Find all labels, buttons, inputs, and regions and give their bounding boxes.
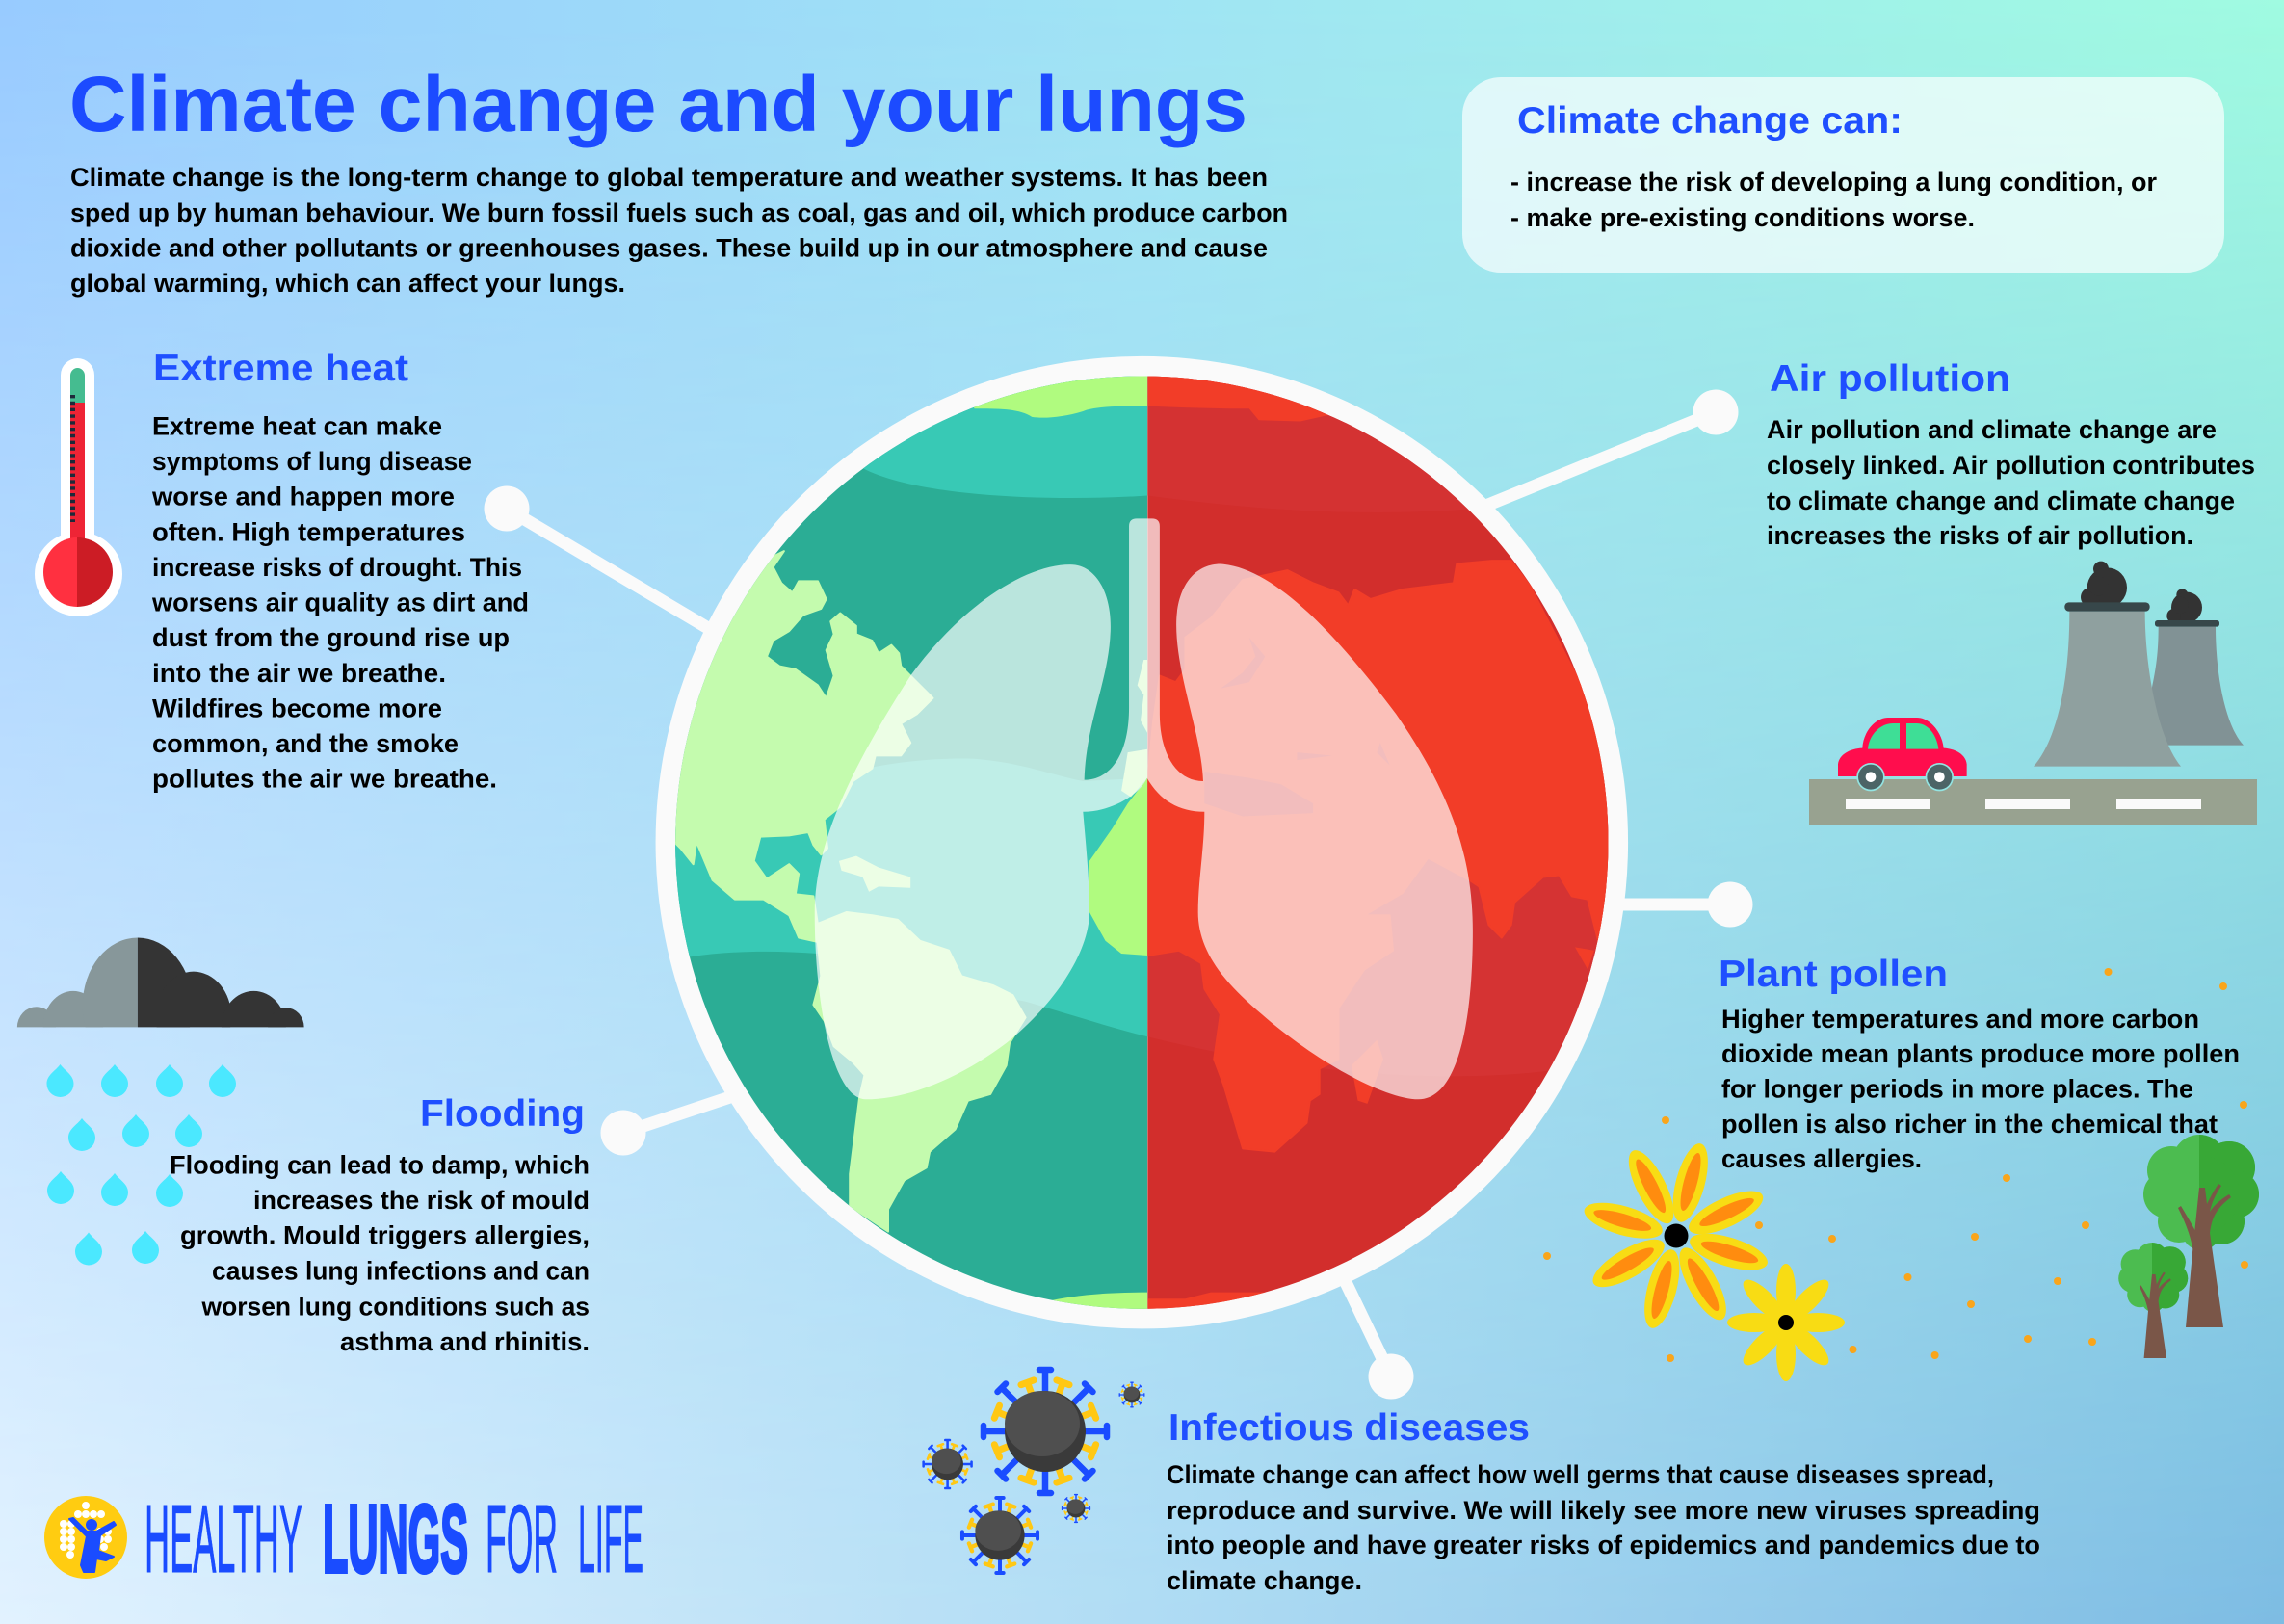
icon: large flower — [1581, 1139, 1772, 1332]
heading: extreme heat: Extreme heat — [153, 348, 408, 389]
lungs and trachea — [815, 518, 1473, 1099]
title: Climate change and your lungs — [69, 61, 1247, 148]
icon: thermometer — [35, 358, 122, 616]
text: extreme heat: increase risks of drought. This — [152, 553, 522, 582]
logo: Healthy Lungs for Life — [44, 1485, 643, 1593]
heading: air pollution: Air pollution — [1770, 358, 2010, 400]
intro text block: Climate change is the long-term change to global temperature and weather systems. It has been — [70, 163, 1268, 192]
heading: plant pollen: Plant pollen — [1719, 954, 1948, 995]
text: infectious diseases: into people and have greater risks of epidemics and pandemics due to — [1167, 1531, 2040, 1559]
text: extreme heat: into the air we breathe. — [152, 659, 446, 688]
wordmark: FOR — [486, 1485, 558, 1593]
text: extreme heat: symptoms of lung disease — [152, 447, 472, 476]
text: flooding: Flooding can lead to damp, which — [170, 1150, 590, 1179]
callout text: - make pre-existing conditions worse. — [1510, 203, 1975, 232]
text: air pollution: Air pollution and climate change are — [1767, 415, 2217, 444]
text: extreme heat: pollutes the air we breathe. — [152, 765, 497, 794]
text: extreme heat: Wildfires become more — [152, 694, 442, 722]
intro text block: sped up by human behaviour. We burn fossil fuels such as coal, gas and oil, which produce carbon — [70, 198, 1288, 227]
icon: small flower — [1727, 1264, 1845, 1381]
text: extreme heat: worsens air quality as dirt and — [151, 589, 529, 617]
wordmark: LUNGS — [323, 1485, 468, 1593]
text: extreme heat — [151, 412, 529, 794]
text: plant pollen: dioxide mean plants produce more pollen — [1721, 1039, 2240, 1068]
icon: road — [1809, 779, 2257, 825]
text: infectious diseases: Climate change can affect how well germs that cause diseases spread, — [1167, 1460, 1994, 1489]
icon: logo badge — [44, 1496, 127, 1579]
text: extreme heat: Extreme heat can make — [152, 412, 442, 441]
text: extreme heat: worse and happen more — [151, 483, 455, 511]
text: extreme heat: common, and the smoke — [152, 729, 459, 758]
intro text block: dioxide and other pollutants or greenhouses gases. These build up in our atmosphere and cause — [70, 233, 1268, 262]
text: flooding: growth. Mould triggers allergies, — [180, 1221, 590, 1250]
icon: large tree — [2143, 1135, 2259, 1327]
callout text — [1510, 168, 2157, 232]
text: flooding: increases the risk of mould — [253, 1186, 590, 1215]
text: air pollution: to climate change and climate change — [1767, 486, 2235, 515]
text: infectious diseases: reproduce and survive. We will likely see more new viruses spreading — [1167, 1496, 2040, 1525]
icon: back tower — [2151, 589, 2244, 746]
heading: infectious diseases: Infectious diseases — [1168, 1407, 1530, 1449]
text: flooding: asthma and rhinitis. — [340, 1327, 590, 1356]
intro text block — [70, 163, 1288, 298]
text: flooding: causes lung infections and can — [212, 1256, 590, 1285]
illustration: road, car and cooling towers — [1809, 562, 2257, 825]
text: air pollution: closely linked. Air pollution contributes — [1767, 451, 2255, 480]
icon: car — [1838, 718, 1967, 791]
heading: flooding: Flooding — [420, 1093, 585, 1135]
panel: infectious diseases — [1167, 1407, 2040, 1595]
text: extreme heat: dust from the ground rise up — [152, 623, 510, 652]
wordmark: HEALTHY — [144, 1485, 302, 1593]
panel: air pollution — [1767, 358, 2255, 550]
globe left half: healthy earth — [675, 376, 1148, 1309]
text: extreme heat: often. High temperatures — [152, 517, 465, 546]
text: plant pollen: pollen is also richer in the chemical that — [1721, 1110, 2218, 1139]
callout heading: Climate change can: — [1517, 100, 1903, 142]
text: flooding — [170, 1150, 590, 1356]
globe with lungs — [636, 337, 1659, 1359]
callout text: - increase the risk of developing a lung condition, or — [1510, 168, 2157, 196]
globe right half: overheated earth — [1147, 376, 1609, 1309]
icon: front tower — [2034, 562, 2181, 767]
panel: plant pollen — [1719, 954, 2240, 1173]
icon: viruses — [924, 1370, 1144, 1573]
text: flooding: worsen lung conditions such as — [201, 1293, 590, 1322]
panel: flooding — [170, 1093, 590, 1356]
connectors from globe to topics — [484, 389, 1753, 1399]
text: plant pollen: causes allergies. — [1721, 1144, 1922, 1173]
icon: small tree — [2118, 1243, 2188, 1358]
text: plant pollen — [1721, 1005, 2240, 1173]
intro text block: global warming, which can affect your lungs. — [70, 269, 625, 298]
text: air pollution: increases the risks of air pollution. — [1767, 521, 2193, 550]
text: plant pollen: Higher temperatures and more carbon — [1721, 1005, 2199, 1034]
panel: extreme heat — [151, 348, 529, 794]
text: plant pollen: for longer periods in more places. The — [1721, 1075, 2193, 1104]
text: infectious diseases: climate change. — [1167, 1566, 1362, 1595]
pollen dots — [1543, 968, 2248, 1362]
text: air pollution — [1767, 415, 2255, 550]
text: infectious diseases — [1167, 1460, 2040, 1595]
text: LIFE — [578, 1485, 643, 1593]
callout: climate change can — [1462, 77, 2224, 273]
icon: storm cloud — [17, 938, 304, 1027]
icon: rain drops — [46, 1064, 236, 1266]
